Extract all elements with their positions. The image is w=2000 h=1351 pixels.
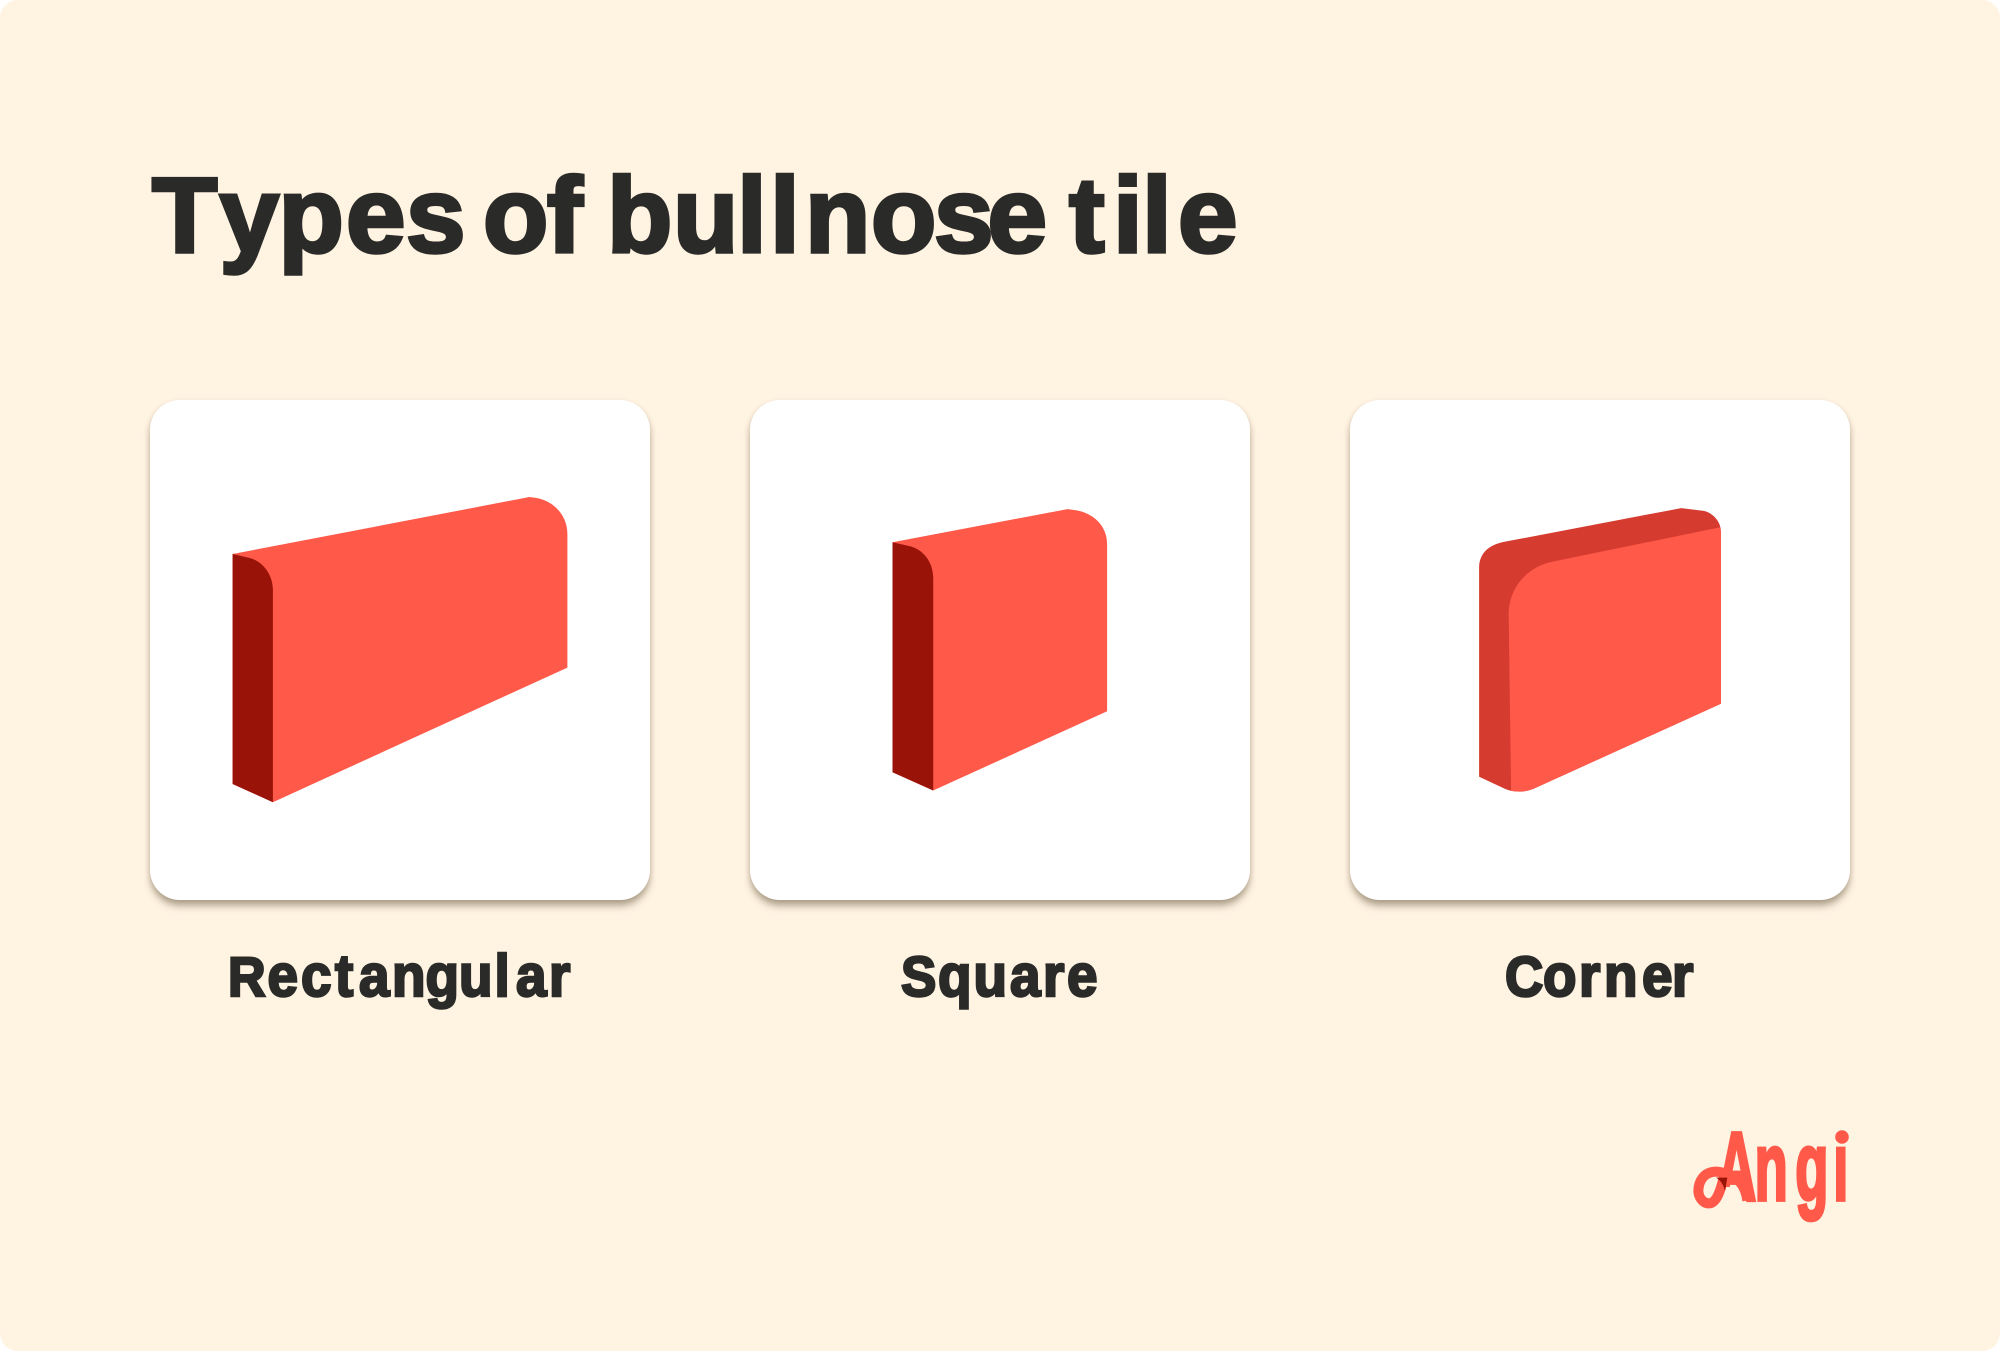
panel: square card: [750, 400, 1250, 900]
icon: square bullnose tile: [892, 509, 1107, 790]
label: Corner: C: [1505, 944, 1543, 1008]
label: Square: quare: [938, 943, 1098, 1009]
tile rounded back edge: [1479, 508, 1721, 792]
tile dark end: [892, 542, 933, 790]
logo i dot mask: [1832, 1122, 1852, 1146]
label: Rectangular: R: [228, 946, 266, 1008]
icon: rectangular bullnose tile: [233, 497, 567, 802]
panel: corner card: [1350, 400, 1850, 900]
tile front face: [1509, 527, 1721, 791]
label: Square: S: [901, 944, 936, 1008]
tile dark end: [233, 554, 273, 802]
label: Corner: orner: [1543, 943, 1693, 1009]
logo i dot: [1835, 1130, 1849, 1144]
logo: Angi: Angi: [1717, 1112, 1848, 1221]
logo A foot mask: [1716, 1187, 1741, 1203]
label: Rectangular: ectangular: [267, 943, 570, 1009]
title: ypes of bullnose tile: [220, 155, 1238, 275]
tile front face: [892, 509, 1107, 790]
panel: rectangular card: [150, 400, 650, 900]
tile front face: [233, 497, 567, 802]
icon: corner bullnose tile: [1479, 508, 1721, 792]
logo loop: [1698, 1172, 1747, 1203]
title: T: [152, 155, 217, 275]
